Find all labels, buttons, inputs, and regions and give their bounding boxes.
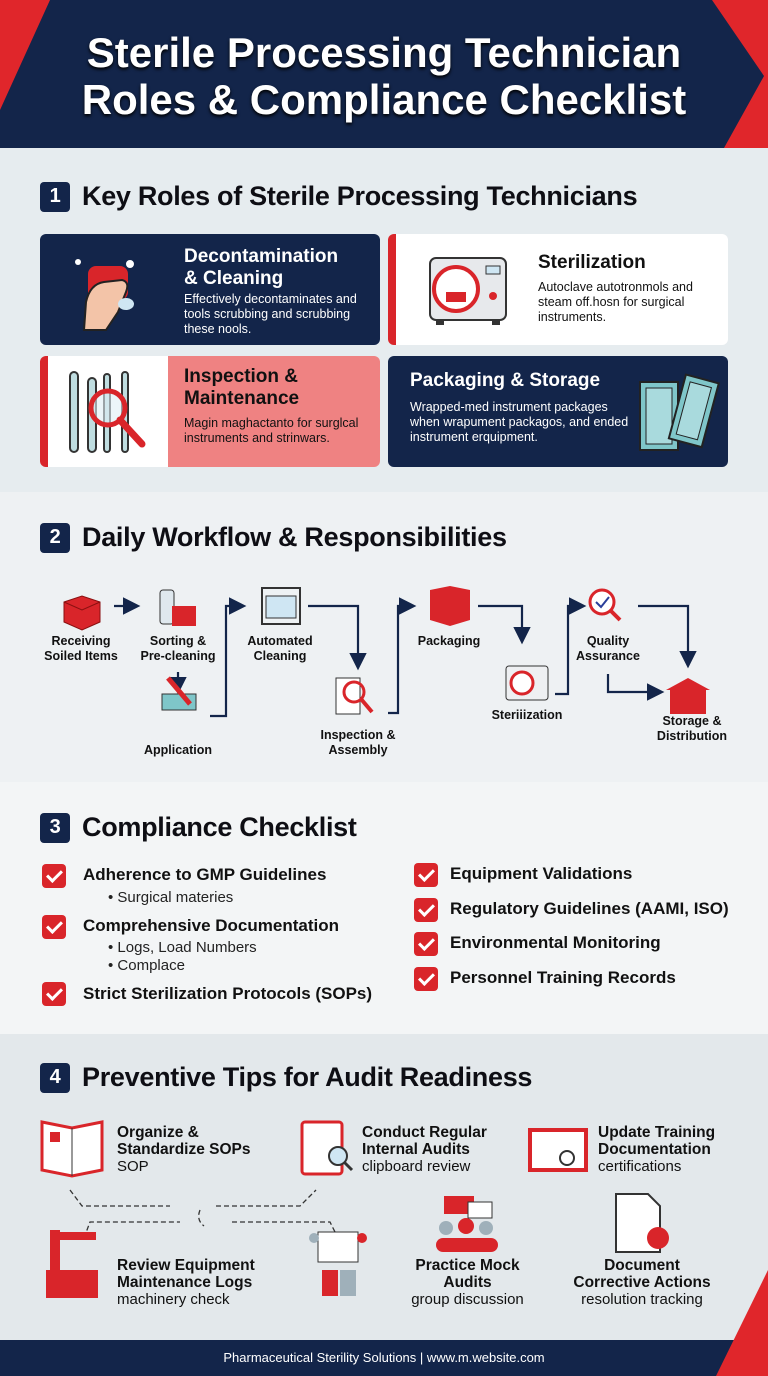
checklist left: Comprehensive Documentation xyxy=(83,916,339,935)
icon: group xyxy=(436,1196,498,1252)
icon: instruments with magnifier xyxy=(69,371,146,453)
tip texts: SOP xyxy=(117,1158,149,1175)
workflow diagram: Application xyxy=(144,743,212,757)
card: packaging: Wrapped-med instrument packages when wrapument packagos, and ended instrument erquipment. xyxy=(410,400,628,444)
section 2 background xyxy=(0,492,768,782)
card: sterilization: Autoclave autotronmols and steam off.hosn for surgical instruments. xyxy=(538,280,693,324)
workflow diagram: Cleaning xyxy=(254,649,306,663)
checklist left: Adherence to GMP Guidelines xyxy=(83,865,326,884)
heading 4: 4 xyxy=(50,1066,60,1088)
card: inspection xyxy=(40,356,380,467)
text: Documentation xyxy=(598,1141,711,1158)
card: sterilization xyxy=(388,234,728,345)
workflow diagram: Automated xyxy=(247,634,313,648)
workflow diagram: Quality xyxy=(587,634,629,648)
heading 3: Compliance Checklist xyxy=(82,812,357,842)
text: Conduct Regular xyxy=(362,1124,487,1141)
icon: document check xyxy=(616,1194,669,1252)
text: Audits xyxy=(443,1274,492,1291)
icon: sterile pouches xyxy=(639,374,720,451)
icon: autoclave xyxy=(429,257,507,325)
workflow diagram: Soiled Items xyxy=(44,649,118,663)
heading 3: 3 xyxy=(50,816,60,838)
workflow arrows xyxy=(64,586,710,718)
tip texts xyxy=(117,1124,251,1175)
checklist right: Environmental Monitoring xyxy=(450,933,661,952)
heading 2: 2 xyxy=(50,526,60,548)
heading 2: Daily Workflow & Responsibilities xyxy=(82,522,507,552)
section 1 background xyxy=(0,148,768,492)
tips icons and connectors xyxy=(40,1120,669,1298)
checklist right: Regulatory Guidelines (AAMI, ISO) xyxy=(450,899,729,918)
card: sterilization: Sterilization xyxy=(538,252,646,273)
workflow diagram: Pre-cleaning xyxy=(140,649,216,663)
tip texts: Organize & xyxy=(117,1124,199,1141)
text: Review Equipment xyxy=(117,1257,255,1274)
card: packaging: Packaging & Storage xyxy=(410,370,600,391)
card: packaging xyxy=(388,356,728,467)
checklist left: • Complace xyxy=(108,957,185,974)
icon: machine xyxy=(46,1230,98,1298)
checklist right xyxy=(414,863,729,991)
workflow diagram: Storage & xyxy=(662,714,722,728)
icon: presentation xyxy=(309,1232,367,1296)
workflow diagram: Sorting & xyxy=(150,634,206,648)
footer: Pharmaceutical Sterility Solutions | www.m.website.com xyxy=(223,1350,545,1365)
header xyxy=(0,0,768,148)
icon: book xyxy=(42,1122,102,1176)
checklist right: Personnel Training Records xyxy=(450,968,676,987)
tip texts: Standardize SOPs xyxy=(117,1141,251,1158)
title: Sterile Processing Technician xyxy=(87,29,681,76)
checklist right: Equipment Validations xyxy=(450,864,632,883)
title: Roles & Compliance Checklist xyxy=(82,76,686,123)
workflow diagram: Inspection & xyxy=(320,728,396,742)
card: decontamination xyxy=(40,234,380,345)
text: group discussion xyxy=(411,1291,524,1308)
text: Update Training xyxy=(598,1124,715,1141)
workflow diagram: Steriiization xyxy=(492,708,562,722)
workflow diagram: Receiving xyxy=(51,634,111,648)
workflow diagram: Assembly xyxy=(328,743,388,757)
checklist left xyxy=(42,864,372,1006)
text: resolution tracking xyxy=(581,1291,703,1308)
card: inspection: Inspection & xyxy=(184,366,298,387)
section 4 background xyxy=(0,1034,768,1340)
section 3 background xyxy=(0,782,768,1034)
text: Maintenance Logs xyxy=(117,1274,252,1291)
text: Internal Audits xyxy=(362,1141,470,1158)
heading 1: Key Roles of Sterile Processing Technicians xyxy=(82,181,637,211)
checklist left: Strict Sterilization Protocols (SOPs) xyxy=(83,984,372,1003)
text: certifications xyxy=(598,1158,681,1175)
card: inspection: Magin maghactanto for surglcal instruments and strinwars. xyxy=(184,416,358,445)
card: decontamination: Decontamination xyxy=(184,246,338,267)
card: decontamination: Effectively decontaminates and tools scrubbing and scrubbing these nools. xyxy=(184,292,357,336)
text: Corrective Actions xyxy=(573,1274,711,1291)
workflow diagram xyxy=(44,586,727,757)
checklist left: • Logs, Load Numbers xyxy=(108,939,257,956)
card: inspection: Maintenance xyxy=(184,388,299,409)
text: Practice Mock xyxy=(415,1257,520,1274)
icon: clipboard xyxy=(302,1122,352,1174)
icons xyxy=(64,596,100,630)
heading 1: 1 xyxy=(50,185,60,207)
heading 4: Preventive Tips for Audit Readiness xyxy=(82,1062,532,1092)
card: decontamination: & Cleaning xyxy=(184,268,283,289)
checklist left: • Surgical materies xyxy=(108,889,233,906)
footer xyxy=(0,1340,768,1376)
text: Document xyxy=(604,1257,680,1274)
workflow diagram: Assurance xyxy=(576,649,640,663)
icon: certificate xyxy=(530,1130,586,1170)
workflow diagram: Distribution xyxy=(657,729,727,743)
icon: hand sponge xyxy=(75,259,134,331)
text: machinery check xyxy=(117,1291,230,1308)
workflow diagram: Packaging xyxy=(418,634,480,648)
title xyxy=(82,29,688,126)
text: clipboard review xyxy=(362,1158,470,1175)
